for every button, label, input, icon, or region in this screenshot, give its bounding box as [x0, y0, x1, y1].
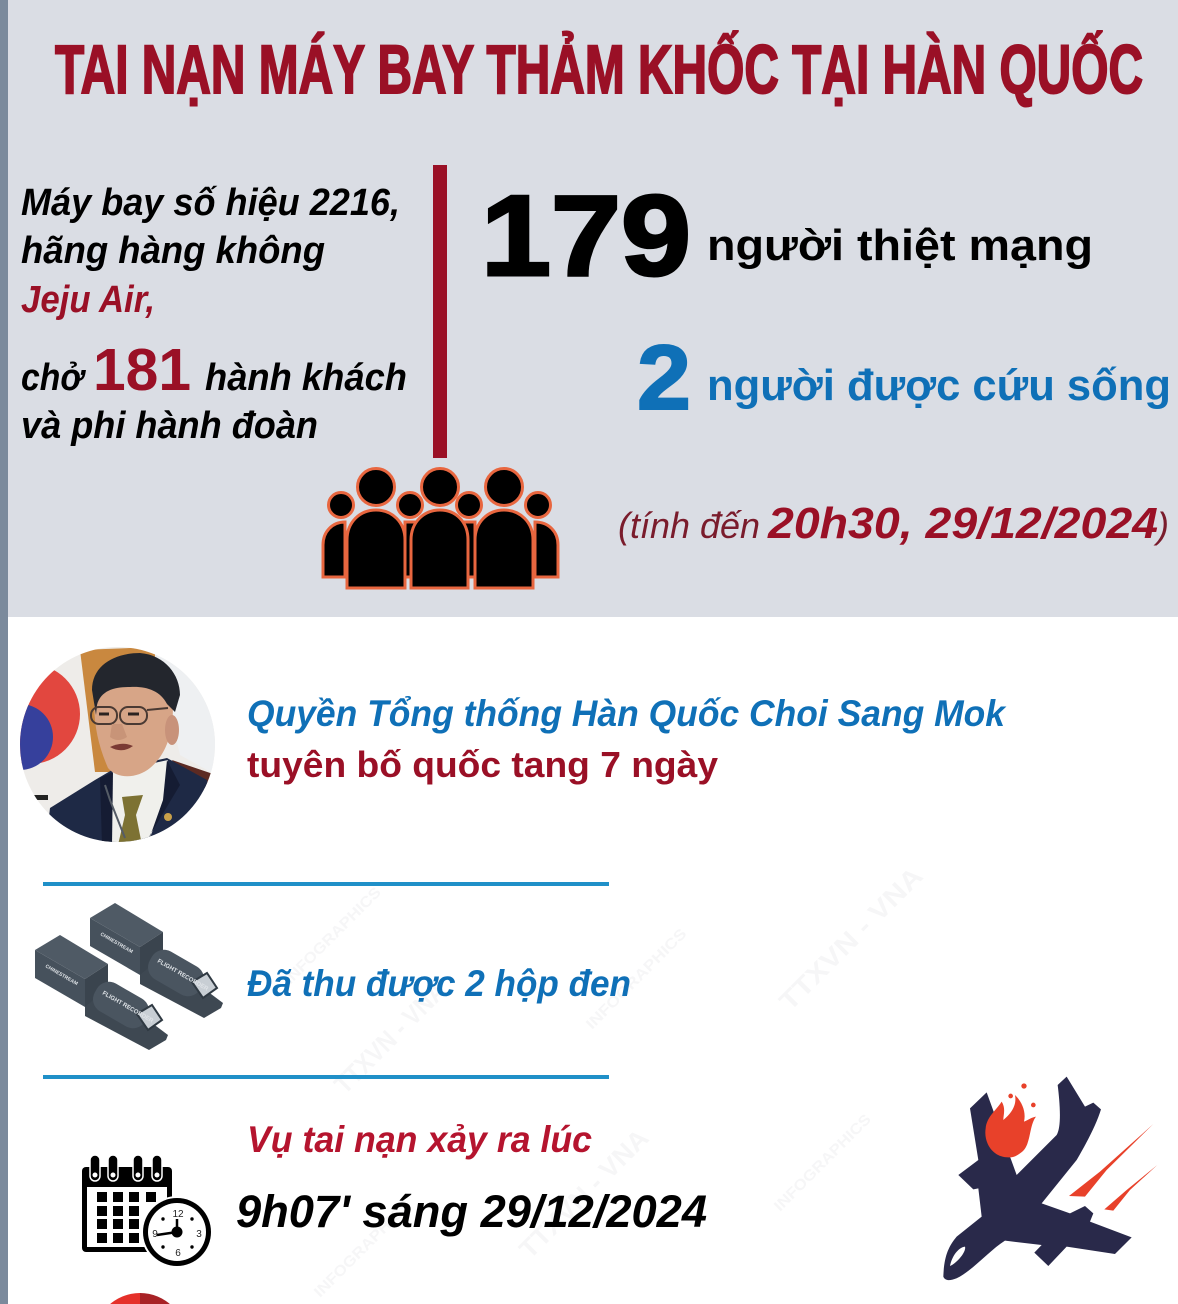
text block: flight details: Jeju Air, [21, 279, 155, 321]
stat: survivors: 2 [637, 327, 691, 429]
watermarks: TTXVN - VNA [513, 1123, 655, 1264]
timestamp note: (tính đến [618, 505, 760, 546]
front recorder: CHINESTREAM [44, 964, 79, 987]
icon: red circle, cropped at bottom [110, 1293, 170, 1304]
timestamp note: 20h30, 29/12/2024 [767, 499, 1158, 548]
icon: calendar and clock: 12 [172, 1209, 184, 1220]
stat: deaths: 179 [481, 173, 691, 300]
timestamp note [618, 499, 1169, 548]
back recorder: CHINESTREAM [99, 932, 134, 955]
text block: flight details: hành khách [205, 357, 407, 399]
icon: calendar and clock: 3 [196, 1229, 202, 1240]
text block: flight details: và phi hành đoàn [21, 405, 318, 447]
text: accident time: 9h07' sáng 29/12/2024 [236, 1186, 707, 1237]
text block: flight details: 181 [93, 337, 191, 403]
back recorder [90, 903, 223, 1018]
front recorder [35, 935, 168, 1050]
icon: calendar and clock [82, 1155, 213, 1268]
watermarks: INFOGRAPHICS [583, 925, 690, 1033]
icon: crashing plane [943, 1077, 1157, 1280]
text block: flight details: chở [21, 357, 86, 399]
panel: summary background [8, 0, 1178, 617]
watermarks: INFOGRAPHICS [311, 1197, 415, 1301]
icon: calendar and clock: 9 [152, 1229, 158, 1240]
back recorder: FLIGHT RECORDER [156, 959, 210, 993]
front recorder: FLIGHT RECORDER [101, 991, 155, 1025]
text: accident time [236, 1119, 707, 1237]
text block: flight details: Máy bay số hiệu 2216, [21, 182, 400, 224]
stat: deaths [481, 173, 1093, 300]
text block: national mourning: Quyền Tổng thống Hàn Quốc Choi Sang Mok [247, 693, 1007, 734]
icon: group of people [323, 468, 558, 588]
text block: national mourning: tuyên bố quốc tang 7 ngày [247, 744, 718, 785]
text block: flight details: hãng hàng không [21, 230, 325, 272]
stat: deaths: người thiệt mạng [707, 221, 1093, 270]
portrait: Choi Sang Mok [20, 647, 215, 842]
watermarks: TTXVN - VNA [328, 975, 452, 1099]
left edge stripe [0, 0, 8, 1304]
stat: survivors [637, 327, 1171, 429]
text block: flight details [21, 182, 407, 447]
text: accident time: Vụ tai nạn xảy ra lúc [247, 1119, 592, 1160]
text block: national mourning [247, 693, 1007, 785]
stat: survivors: người được cứu sống [707, 361, 1171, 410]
watermarks [281, 861, 929, 1301]
timestamp note: ) [1153, 505, 1169, 546]
vertical divider bar [433, 165, 447, 458]
icon: calendar and clock: 6 [175, 1248, 181, 1259]
watermarks: INFOGRAPHICS [771, 1111, 875, 1215]
icon: two flight recorders [35, 903, 223, 1050]
watermarks: INFOGRAPHICS [281, 884, 385, 988]
text: black boxes recovered: Đã thu được 2 hộp đen [247, 963, 631, 1004]
watermarks: TTXVN - VNA [773, 861, 929, 1016]
